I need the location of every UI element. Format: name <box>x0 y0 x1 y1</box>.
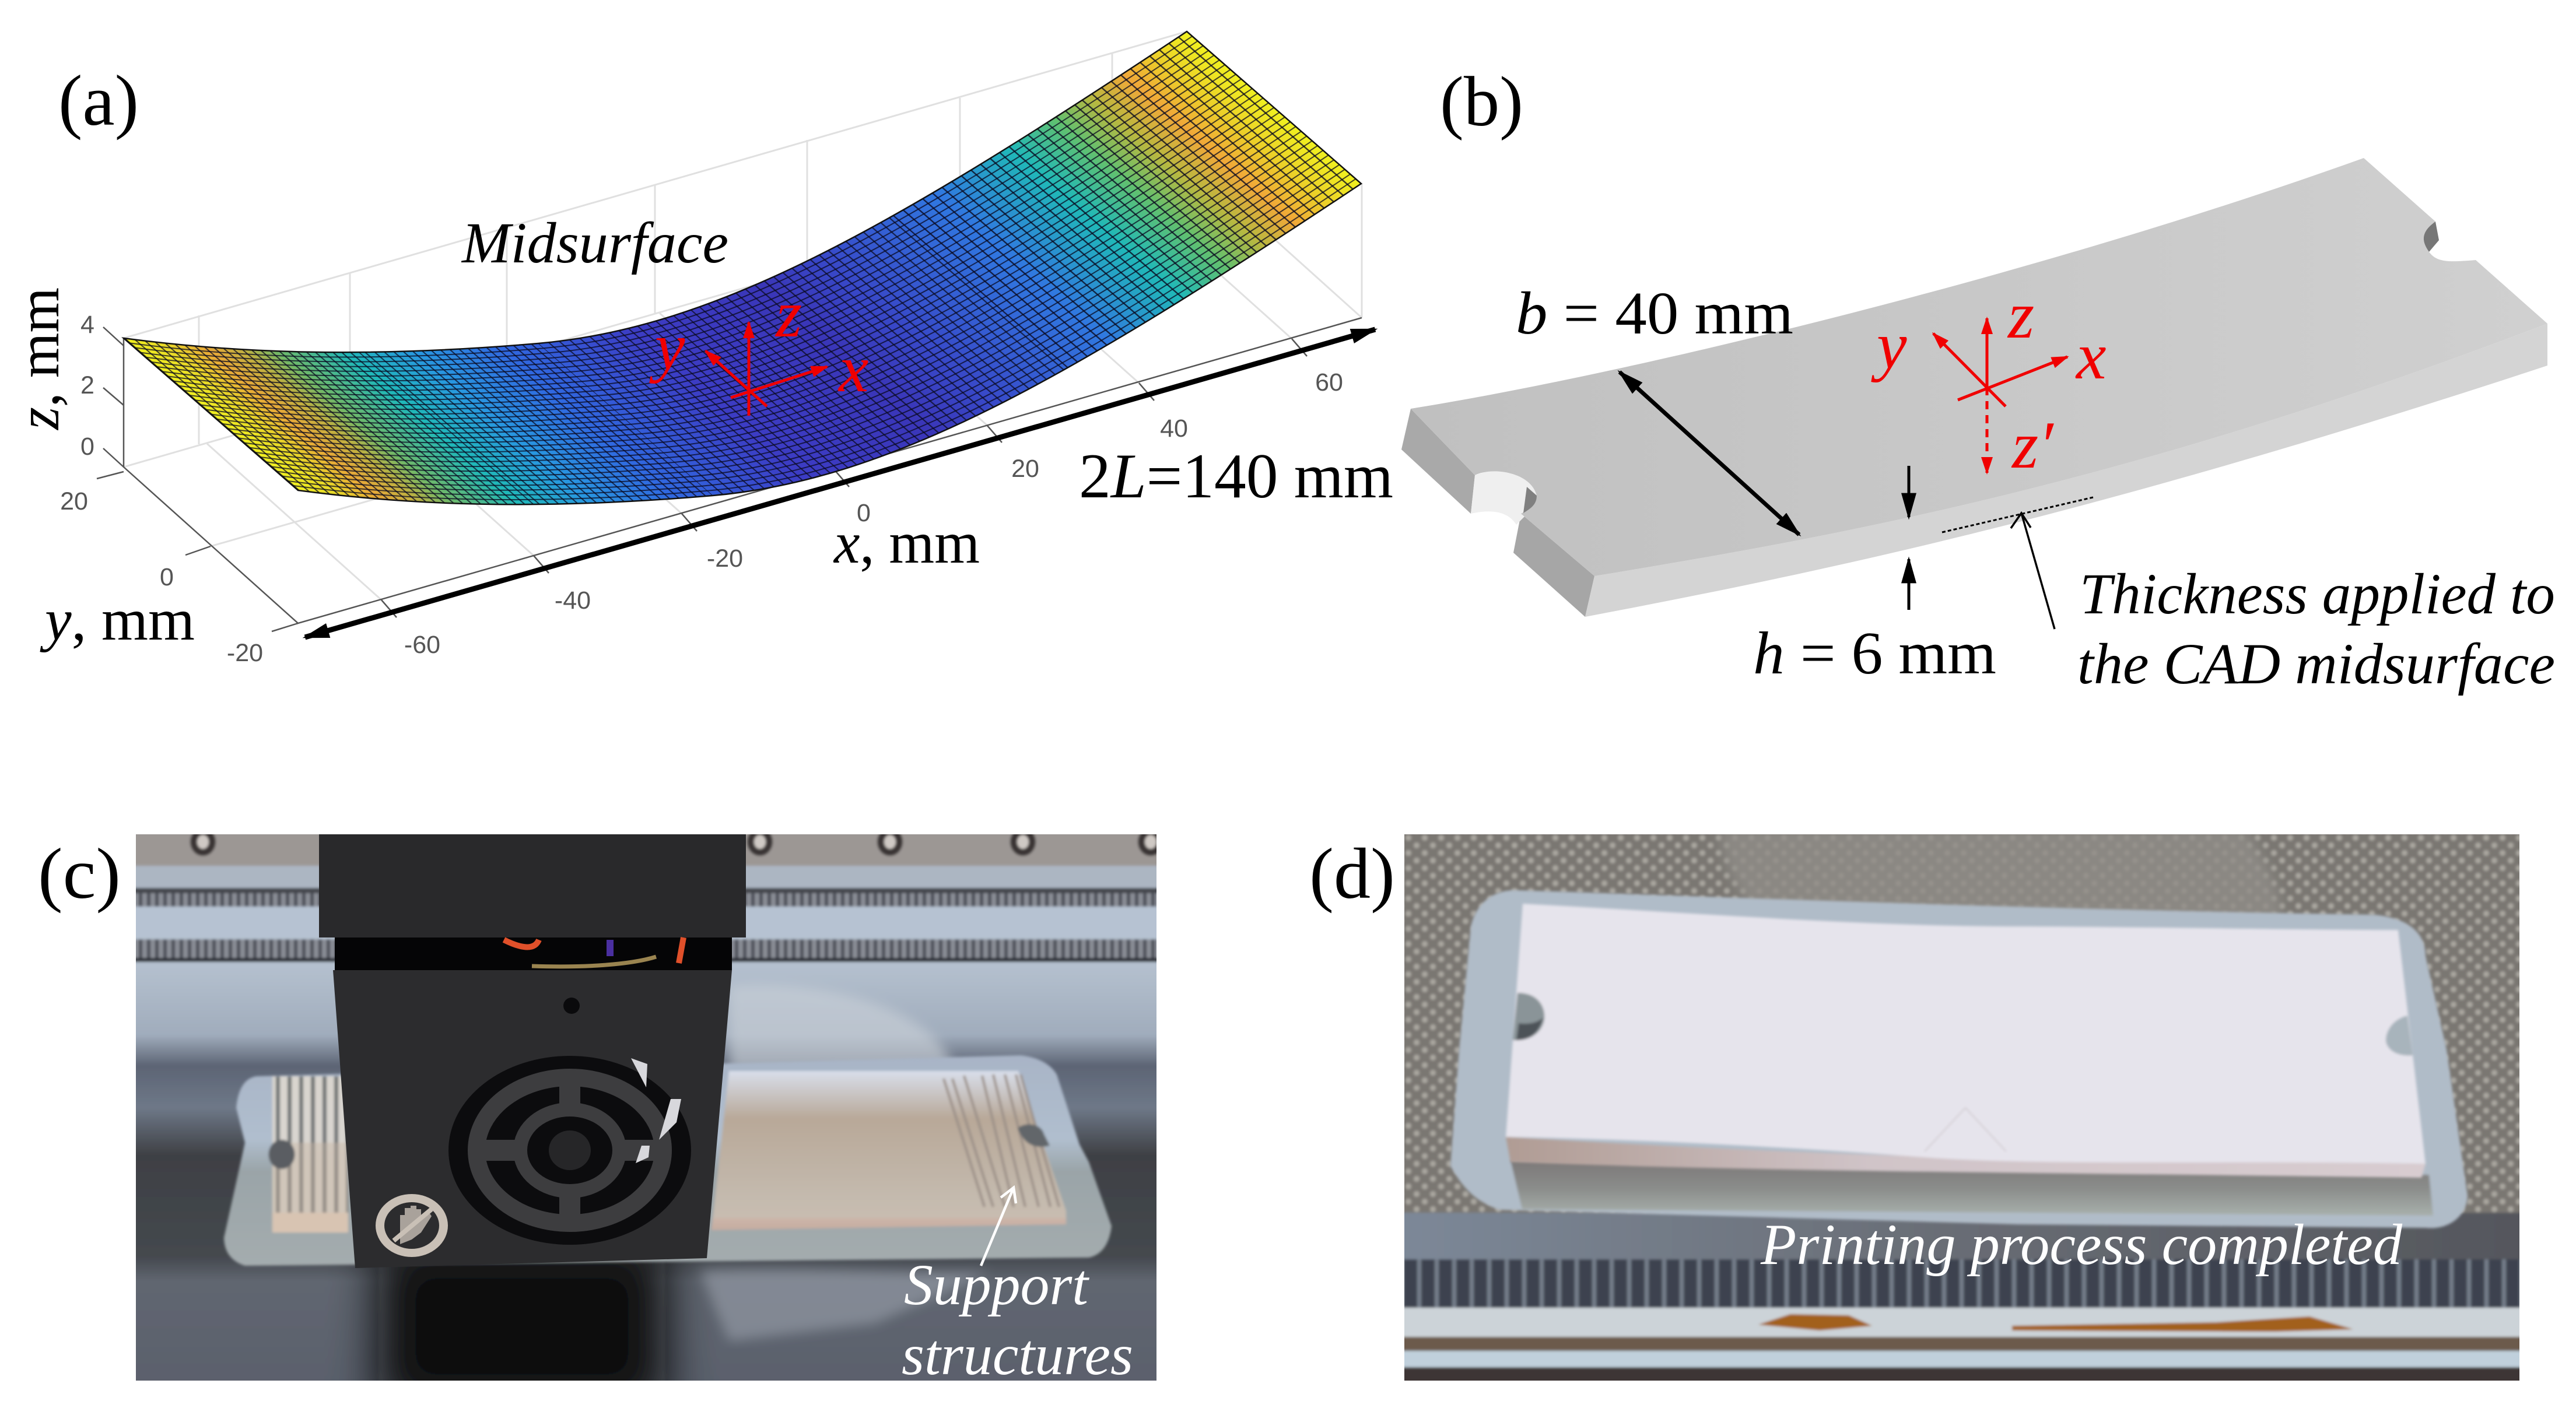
label: h = 6 mm: h = 6 mm <box>1753 620 1996 687</box>
label (d): (d) <box>1309 834 1395 914</box>
label (b): (b) <box>1440 62 1523 141</box>
photo: raft <box>1450 890 2468 1228</box>
white callout arrow <box>981 1188 1016 1266</box>
z axis tick labels: 2 <box>80 371 94 399</box>
label: b = 40 mm: b = 40 mm <box>1516 280 1793 347</box>
annotation: thickness: the CAD midsurface <box>2077 631 2555 696</box>
panel: (b) CAD solid <box>1401 62 2555 696</box>
icon: fan grille <box>448 1056 691 1245</box>
panel: (a) midsurface plot <box>6 0 1396 913</box>
panel: (d) completed print <box>1309 828 2528 1391</box>
red axis labels: y <box>1871 308 1907 383</box>
y axis tick labels: -20 <box>227 639 263 667</box>
z axis tick labels: 4 <box>80 311 94 339</box>
photo: printer background <box>128 828 1166 1408</box>
red axis labels <box>1871 278 2107 483</box>
label: Midsurface: Midsurface <box>461 210 728 275</box>
x axis tick labels: -60 <box>404 631 440 659</box>
photo: printed specimen <box>1506 904 2426 1178</box>
x axis tick labels: 40 <box>1160 415 1188 443</box>
red axis labels: z <box>774 277 802 352</box>
annotation: thickness: Thickness applied to <box>2080 561 2555 626</box>
red axis labels <box>649 277 869 406</box>
x axis tick labels: -20 <box>707 545 743 573</box>
label: y, mm: y, mm <box>40 587 195 653</box>
red axis labels: x <box>837 332 869 406</box>
z axis tick labels: 0 <box>80 433 94 461</box>
colored mesh surface <box>121 30 1362 505</box>
red axis labels: x <box>2075 319 2107 394</box>
x axis tick labels: 20 <box>1011 455 1039 483</box>
photo: print head <box>319 834 746 1268</box>
label: Printing process completed: Printing process completed <box>1760 1212 2403 1277</box>
red axis labels: z <box>2007 278 2034 353</box>
label: x, mm: x, mm <box>833 510 980 576</box>
label: 2L=140 mm: 2L=140 mm <box>1079 441 1393 511</box>
label: Support structures: Support <box>904 1252 1089 1317</box>
3D axes and grid <box>97 31 1362 631</box>
label: z, mm: z, mm <box>6 287 72 431</box>
icon: no-touch sign <box>376 1194 448 1257</box>
y axis tick labels: 0 <box>160 563 174 591</box>
red coordinate axes <box>706 322 827 416</box>
dashed midsurface line <box>1942 497 2093 532</box>
red axis labels: z′ <box>2011 408 2054 483</box>
red coordinate axes <box>1933 318 2067 473</box>
panel: (c) printing with support structures <box>38 828 1166 1408</box>
thin leader arrow <box>2011 513 2055 629</box>
x axis tick labels: 0 <box>857 499 871 527</box>
z axis tick labels <box>80 311 94 461</box>
photo: bed and machine <box>1397 828 2528 1391</box>
red axis labels: y <box>649 310 685 384</box>
x axis tick labels: -40 <box>555 587 591 615</box>
label (a): (a) <box>58 61 139 141</box>
solid beam <box>1401 158 2547 617</box>
label: Support structures: structures <box>902 1322 1133 1387</box>
dimension arrow: b <box>1620 372 1799 535</box>
x axis tick labels: 60 <box>1315 368 1343 396</box>
x axis tick labels <box>404 368 1343 659</box>
y axis tick labels: 20 <box>60 487 88 515</box>
arrow: length dimension <box>305 329 1375 637</box>
label (c): (c) <box>38 834 121 914</box>
photo: raft and printed part <box>224 1055 1112 1266</box>
annotation: thickness <box>2077 561 2555 696</box>
y axis tick labels <box>60 487 263 667</box>
dimension arrows: h <box>1907 466 1911 610</box>
label: Support structures <box>902 1252 1133 1387</box>
